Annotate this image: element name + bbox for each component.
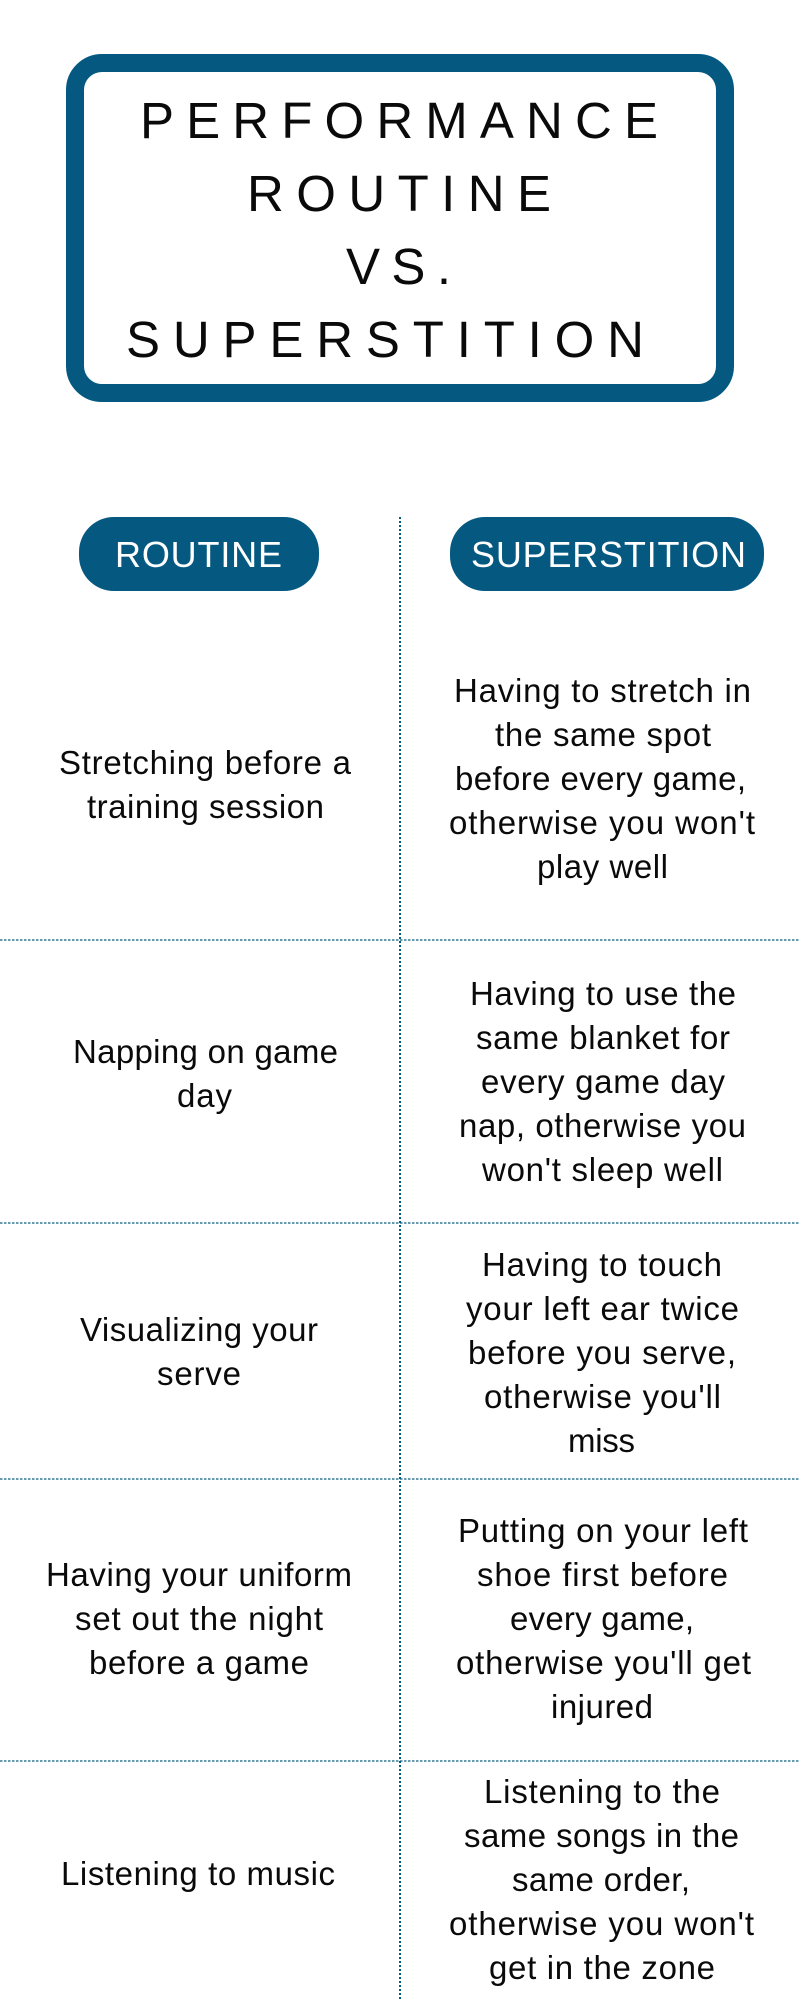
row 5 routine: Listening to music: [61, 1855, 335, 1892]
row 3 superstition: Having to touch: [482, 1246, 722, 1283]
column heading: routine: ROUTINE: [115, 534, 282, 575]
row 5 superstition: same songs in the: [464, 1817, 739, 1854]
row 1 routine: Stretching before a: [59, 744, 352, 781]
row 2 superstition: won't sleep well: [481, 1151, 723, 1188]
row 3 routine: [80, 1311, 318, 1392]
row 4 routine: [46, 1556, 352, 1681]
title box: ROUTINE: [247, 165, 551, 222]
row 2 superstition: every game day: [481, 1063, 726, 1100]
row 4 superstition: otherwise you'll get: [456, 1644, 751, 1681]
title box: [75, 63, 725, 393]
row 2 superstition: [459, 975, 746, 1188]
row 2 routine: [73, 1033, 338, 1114]
horizontal row dividers: [0, 940, 800, 1761]
row 1 superstition: before every game,: [455, 760, 746, 797]
row 1 superstition: Having to stretch in: [454, 672, 751, 709]
row 5 superstition: Listening to the: [484, 1773, 720, 1810]
row 4 routine: set out the night: [75, 1600, 323, 1637]
row 4 superstition: Putting on your left: [458, 1512, 748, 1549]
row 2 routine: day: [177, 1077, 232, 1114]
row 3 superstition: your left ear twice: [466, 1290, 739, 1327]
row 4 routine: before a game: [89, 1644, 309, 1681]
column heading: superstition: SUPERSTITION: [471, 534, 746, 575]
row 1 routine: [59, 744, 352, 825]
row 4 superstition: injured: [551, 1688, 653, 1725]
row 3 routine: serve: [157, 1355, 241, 1392]
row 3 superstition: [466, 1246, 739, 1459]
title box: SUPERSTITION: [126, 311, 644, 368]
row 1 superstition: [449, 672, 755, 885]
row 3 superstition: miss: [568, 1422, 635, 1459]
row 5 superstition: get in the zone: [489, 1949, 715, 1986]
vertical divider: [399, 517, 401, 2000]
row 1 superstition: play well: [537, 848, 668, 885]
column heading: superstition: [450, 517, 764, 591]
row 4 superstition: every game,: [510, 1600, 694, 1637]
row 3 superstition: otherwise you'll: [484, 1378, 721, 1415]
row 5 superstition: [449, 1773, 754, 1986]
row 1 routine: training session: [87, 788, 324, 825]
row 4 superstition: shoe first before: [477, 1556, 728, 1593]
row 2 superstition: nap, otherwise you: [459, 1107, 746, 1144]
row 4 routine: Having your uniform: [46, 1556, 352, 1593]
row 5 superstition: same order,: [512, 1861, 690, 1898]
row 1 superstition: otherwise you won't: [449, 804, 755, 841]
row 2 superstition: same blanket for: [476, 1019, 730, 1056]
row 2 routine: Napping on game: [73, 1033, 338, 1070]
row 5 superstition: otherwise you won't: [449, 1905, 754, 1942]
row 3 superstition: before you serve,: [468, 1334, 736, 1371]
row 2 superstition: Having to use the: [470, 975, 736, 1012]
row 1 superstition: the same spot: [495, 716, 711, 753]
row 3 routine: Visualizing your: [80, 1311, 318, 1348]
title box: VS.: [346, 238, 451, 295]
title box: PERFORMANCE: [140, 92, 658, 149]
column heading: routine: [79, 517, 319, 591]
row 4 superstition: [456, 1512, 751, 1725]
